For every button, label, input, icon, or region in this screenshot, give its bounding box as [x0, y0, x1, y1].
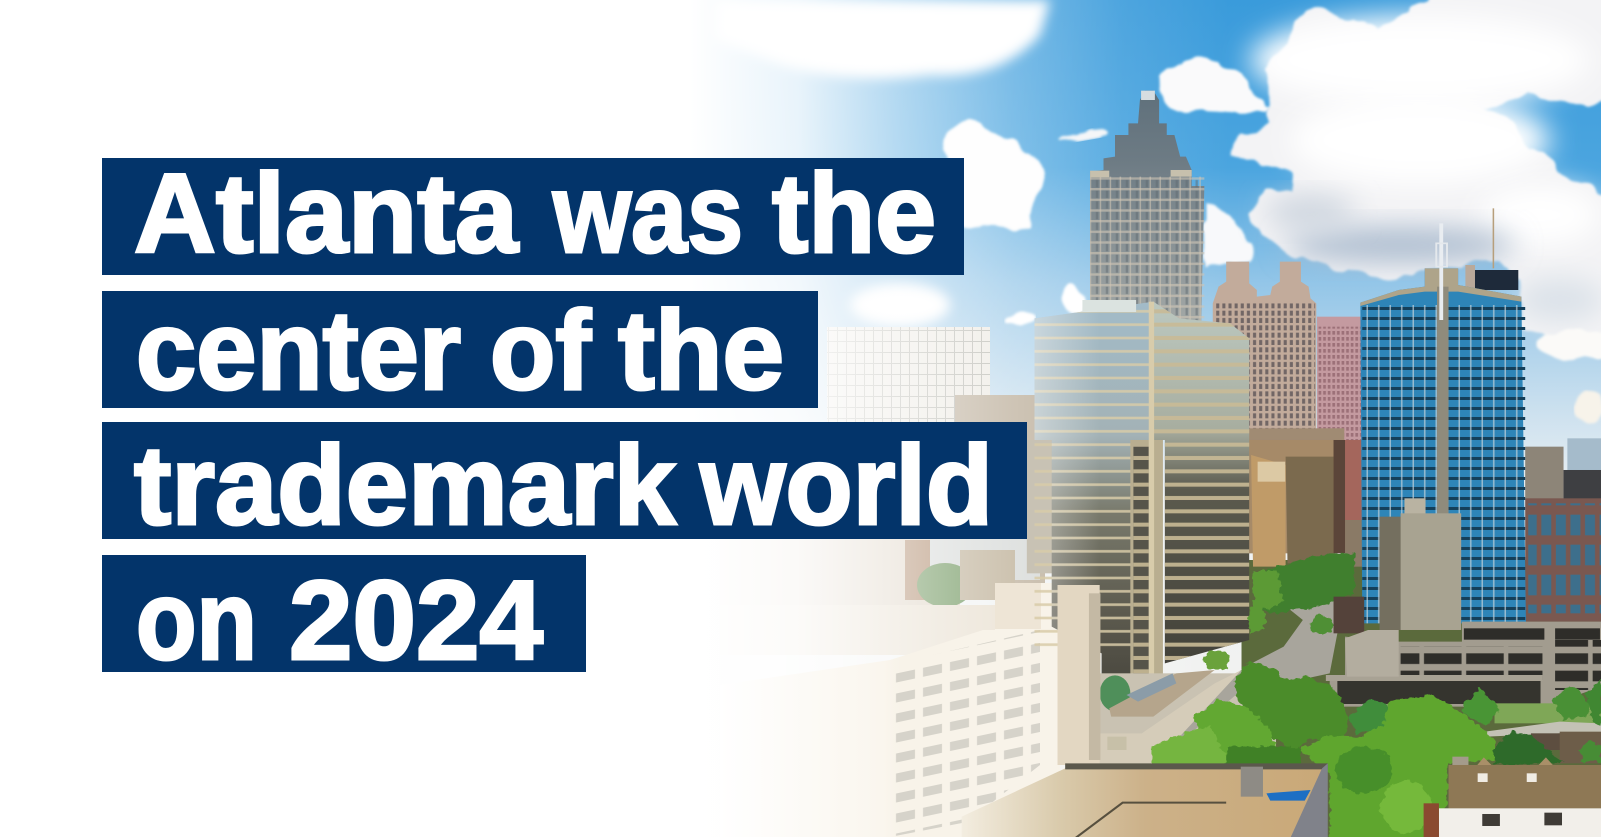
- pale building behind office tower: [1027, 440, 1054, 573]
- headline line 1: Atlanta: [134, 151, 519, 276]
- street with canopy: [1058, 580, 1337, 767]
- headline: [102, 151, 1027, 683]
- headline line 2: center: [136, 288, 461, 413]
- white fade over distant photo: [600, 0, 1240, 837]
- low tan and brown buildings: [1248, 428, 1362, 567]
- foreground trees: [1151, 662, 1601, 837]
- headline line 3: world: [699, 423, 993, 548]
- mid-ground trees: [1204, 553, 1355, 671]
- headline line 3: trademark: [134, 423, 677, 548]
- skyline buildings (scaled group): [962, 91, 1601, 837]
- white parking garage: [720, 583, 1060, 837]
- clouds: [715, 0, 1601, 422]
- background photo: Atlanta skyline: [600, 0, 1601, 837]
- headline line 2: of: [490, 288, 592, 413]
- headline line 4: on: [136, 558, 257, 683]
- twin-topped tan tower: [1213, 262, 1316, 433]
- base ground fill: [1242, 560, 1601, 837]
- pink tower: [1317, 317, 1362, 520]
- hazy background buildings: [720, 327, 1045, 655]
- glass and beige office tower: [1035, 300, 1249, 683]
- headline line 1: was: [552, 151, 743, 276]
- sky: [600, 0, 1601, 837]
- gray concrete building: [1334, 498, 1461, 633]
- headline line 1: [102, 151, 964, 276]
- headline line 4: [102, 555, 586, 683]
- blue glass tower: [1360, 208, 1526, 623]
- headline line 4: 2024: [289, 558, 543, 683]
- tall gray tower: [1090, 91, 1204, 323]
- house: [1424, 757, 1601, 837]
- headline line 2: the: [618, 288, 784, 413]
- headline line 1: the: [772, 151, 936, 276]
- headline line 2: [102, 288, 818, 413]
- headline line 3: [102, 422, 1027, 548]
- rooftop: [962, 763, 1328, 837]
- right background buildings: [1525, 438, 1601, 622]
- lower right lawn and retaining walls: [1485, 703, 1601, 763]
- parking structure: [1326, 622, 1601, 707]
